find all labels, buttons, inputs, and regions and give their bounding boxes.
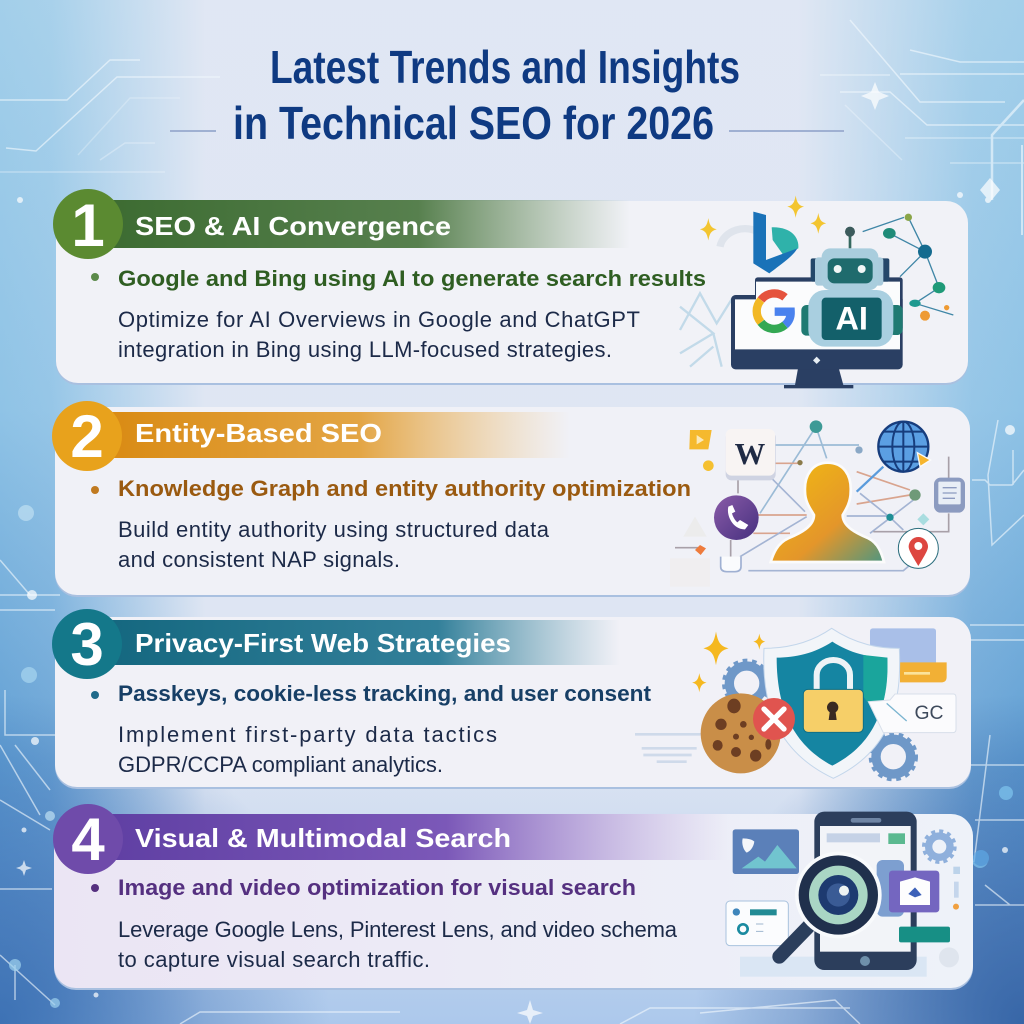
number badge 1: 1 xyxy=(71,192,105,259)
heading 4: Visual & Multimodal Search xyxy=(135,823,511,853)
info card xyxy=(726,901,788,946)
panel: privacy-first web strategies xyxy=(52,609,971,789)
subheading 1: Google and Bing using AI to generate search results xyxy=(118,266,706,291)
heading 1: SEO & AI Convergence xyxy=(135,211,451,241)
heading 3: Privacy-First Web Strategies xyxy=(135,628,511,658)
icon: phone xyxy=(714,495,759,540)
icon: person silhouette xyxy=(771,463,884,562)
monitor xyxy=(731,277,903,388)
body 2: and consistent NAP signals. xyxy=(118,547,400,572)
icon: image card xyxy=(733,829,799,874)
body 1: integration in Bing using LLM-focused strategies. xyxy=(118,337,612,362)
panel: entity-based SEO xyxy=(52,401,970,597)
number badge 2 xyxy=(52,401,122,471)
title: Latest Trends and Insights xyxy=(270,41,740,93)
number badge 2: 2 xyxy=(70,403,104,470)
illustration: AI monitor with robot xyxy=(680,195,953,388)
icon: red X xyxy=(753,698,795,740)
icon: padlock xyxy=(803,660,863,732)
icon: AI robot: AI xyxy=(835,300,868,337)
header band 2 xyxy=(100,412,570,458)
number badge 4 xyxy=(53,804,123,874)
body 4 xyxy=(118,917,678,972)
header band 3 xyxy=(100,620,620,665)
title rule left xyxy=(170,130,216,132)
body 4: to capture visual search traffic. xyxy=(118,947,430,972)
title: in Technical SEO for 2026 xyxy=(233,97,714,149)
icon: smartphone xyxy=(814,812,917,970)
illustration: entity graph xyxy=(670,420,965,587)
icon: magnifier xyxy=(779,852,882,957)
body 3 xyxy=(118,722,497,777)
icon: gear xyxy=(924,831,955,862)
body 3: GDPR/CCPA compliant analytics. xyxy=(118,752,443,777)
body 1 xyxy=(118,307,640,362)
subheading 3: Passkeys, cookie-less tracking, and user consent xyxy=(118,681,652,706)
body 3: Implement first-party data tactics xyxy=(118,722,497,747)
speech bubble: GC xyxy=(914,703,944,724)
icon: Bing logo xyxy=(753,212,798,273)
green bar xyxy=(899,927,950,942)
icon: globe xyxy=(878,422,931,472)
body 2: Build entity authority using structured data xyxy=(118,517,550,542)
subheading 2: Knowledge Graph and entity authority optimization xyxy=(118,476,691,501)
body 2 xyxy=(118,517,550,572)
icon: AI robot xyxy=(801,227,903,347)
body 4: Leverage Google Lens, Pinterest Lens, and video schema xyxy=(118,917,678,942)
panel: SEO and AI convergence xyxy=(53,189,968,388)
number badge 3: 3 xyxy=(70,611,104,678)
icon: document device xyxy=(934,478,965,513)
number badge 1 xyxy=(53,189,123,259)
icon: Wikipedia card: W xyxy=(735,437,766,471)
title rule right xyxy=(729,130,844,132)
speech bubble xyxy=(868,694,956,733)
number badge 3 xyxy=(52,609,122,679)
icon: Google logo xyxy=(757,293,791,329)
number badge 4: 4 xyxy=(71,806,105,873)
body 1: Optimize for AI Overviews in Google and ChatGPT xyxy=(118,307,640,332)
illustration: shield, lock and cookie xyxy=(635,628,956,779)
bullet 1 xyxy=(91,273,99,281)
title xyxy=(233,41,740,149)
illustration: phone and magnifier xyxy=(726,812,960,977)
bullet 3 xyxy=(91,691,99,699)
bullet 4 xyxy=(91,884,99,892)
icon: location pin xyxy=(898,528,938,568)
bullet 2 xyxy=(91,486,99,494)
header band 1 xyxy=(100,200,630,248)
icon: Wikipedia card xyxy=(726,429,776,480)
subheading 4: Image and video optimization for visual search xyxy=(118,875,636,900)
header band 4 xyxy=(100,814,730,860)
panel: visual and multimodal search xyxy=(53,804,973,990)
icon: cookie xyxy=(701,693,781,773)
icon: purple card xyxy=(889,871,939,912)
heading 2: Entity-Based SEO xyxy=(135,418,382,448)
icon: shield xyxy=(764,628,900,778)
